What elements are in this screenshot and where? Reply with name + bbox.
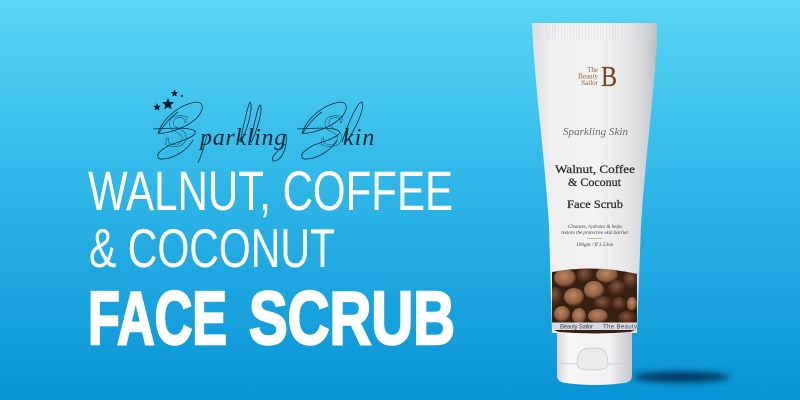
tube description: Cleanses, hydrates & helps [568, 225, 622, 230]
brand logo: Beauty [578, 72, 598, 80]
script text: S [165, 105, 188, 156]
tube product name: Face Scrub [567, 197, 623, 211]
tube product name: Walnut, Coffee [555, 162, 635, 176]
headline line 1: WALNUT, COFFEE [88, 159, 453, 222]
cast shadow [633, 372, 729, 382]
icon: stars [153, 90, 183, 110]
product tube [532, 23, 657, 385]
headline line 3: SCRUB [249, 276, 455, 360]
headline line 3: FACE [88, 276, 227, 360]
tube description [561, 225, 629, 248]
script heading [153, 102, 375, 163]
tube description: 100gm / fl 3.53oz [576, 243, 613, 248]
brand logo: Sailor [581, 79, 599, 87]
tube product name [555, 162, 635, 211]
headline line 2: & COCONUT [89, 217, 335, 279]
brand strip: The Beauty [603, 324, 637, 330]
tube body [532, 23, 657, 333]
tube product name: & Coconut [568, 175, 622, 189]
headline line 3 [88, 276, 455, 360]
decorative swashes [153, 102, 363, 163]
tube description: restore the protective skin barrier. [561, 231, 629, 236]
script text: kin [343, 125, 375, 151]
script text: S [309, 105, 344, 156]
script text: parkling [198, 125, 287, 151]
tube crimp [532, 23, 657, 41]
brand logo [578, 62, 617, 93]
tube cap [557, 330, 632, 385]
walnut band [552, 268, 637, 334]
brand logo: B [601, 62, 617, 93]
tube script label: Sparkling Skin [563, 126, 628, 138]
brand strip [552, 322, 637, 330]
brand strip: Beauty Sailor [560, 324, 593, 330]
brand logo: The [587, 66, 598, 74]
